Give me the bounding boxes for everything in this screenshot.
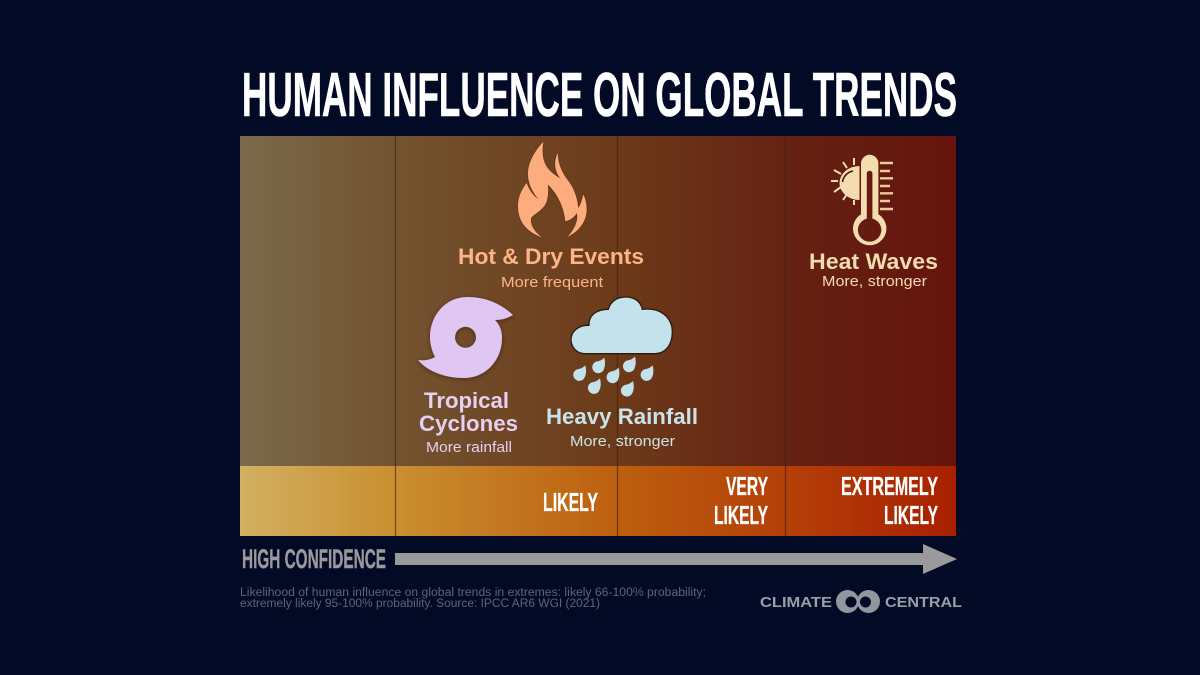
label: heavy rainfall [546,404,698,450]
footnote: Likelihood of human influence on global trends in extremes: likely 66-100% probability; [240,587,706,599]
logo: climate central [760,590,962,613]
label: hot and dry events [458,244,644,291]
label: tropical cyclones: More rainfall [426,439,512,456]
label: very likely: VERY [726,471,768,501]
label: extremely likely [841,471,938,530]
label: heat waves: More, stronger [822,273,927,290]
label: tropical cyclones: Cyclones [419,411,518,436]
panel: chart area [240,136,956,536]
label: tropical cyclones: Tropical [424,388,509,413]
logo: climate central: CLIMATE [760,595,832,611]
logo: climate central: CENTRAL [885,595,962,611]
label: very likely [714,471,768,530]
label: high confidence: HIGH CONFIDENCE [242,544,386,574]
label: hot and dry events: More frequent [501,274,604,291]
icon: thermometer and sun [831,155,893,245]
label: hot and dry events: Hot & Dry Events [458,244,644,269]
footnote [240,587,706,610]
label: very likely: LIKELY [714,500,768,530]
label: heavy rainfall: More, stronger [570,433,675,450]
label: extremely likely: EXTREMELY [841,471,938,501]
footnote: extremely likely 95-100% probability. Source: IPCC AR6 WGI (2021) [240,598,600,610]
icon: tropical cyclone [418,297,513,378]
label: tropical cyclones [419,388,518,456]
label: heat waves: Heat Waves [809,249,938,274]
label: extremely likely: LIKELY [884,500,938,530]
icon: flame [518,142,587,237]
arrow: confidence [395,544,957,574]
label: likely: LIKELY [543,487,598,517]
icon: rain cloud [571,297,672,397]
label: heat waves [809,249,938,290]
label: heavy rainfall: Heavy Rainfall [546,404,698,429]
